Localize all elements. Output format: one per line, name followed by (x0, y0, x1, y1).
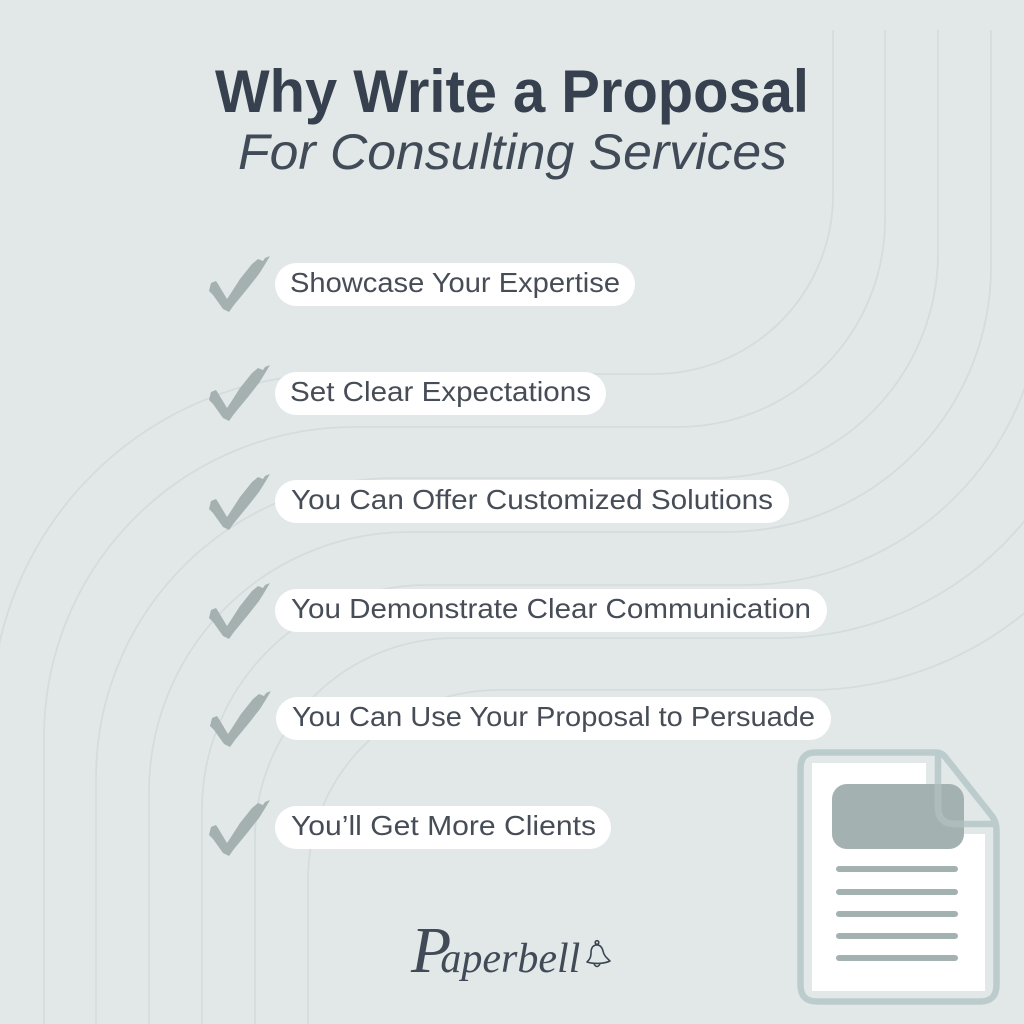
item 4: You Demonstrate Clear Communication: You Demonstrate Clear Communication (291, 593, 811, 624)
heading: Why Write a Proposal: Why Write a Proposal (215, 58, 809, 125)
logo wordmark: Paperbell (410, 914, 580, 987)
document outline with folded corner (800, 752, 996, 1002)
item 6: You'll Get More Clients: You’ll Get More Clients (291, 810, 596, 841)
item 1: Showcase Your Expertise: Showcase Your Expertise (290, 267, 620, 298)
document text lines (839, 869, 955, 958)
item 2: Set Clear Expectations: Set Clear Expectations (290, 376, 591, 407)
item 5: You Can Use Your Proposal to Persuade: You Can Use Your Proposal to Persuade (292, 701, 815, 732)
document header block (832, 784, 964, 849)
title (215, 58, 809, 180)
item 2: Set Clear Expectations (209, 365, 606, 421)
document page (812, 763, 985, 991)
icon: bell (587, 941, 610, 966)
item 6: You'll Get More Clients (209, 800, 611, 856)
item 4: You Demonstrate Clear Communication (209, 583, 827, 639)
subheading: For Consulting Services: For Consulting Services (238, 124, 787, 180)
icon: proposal document (800, 752, 996, 1002)
checklist (209, 256, 831, 856)
logo: Paperbell (410, 914, 610, 987)
item 3: You Can Offer Customized Solutions: You Can Offer Customized Solutions (291, 484, 773, 515)
item 3: You Can Offer Customized Solutions (209, 474, 789, 530)
item 1: Showcase Your Expertise (209, 256, 635, 312)
item 5: You Can Use Your Proposal to Persuade (210, 691, 831, 747)
